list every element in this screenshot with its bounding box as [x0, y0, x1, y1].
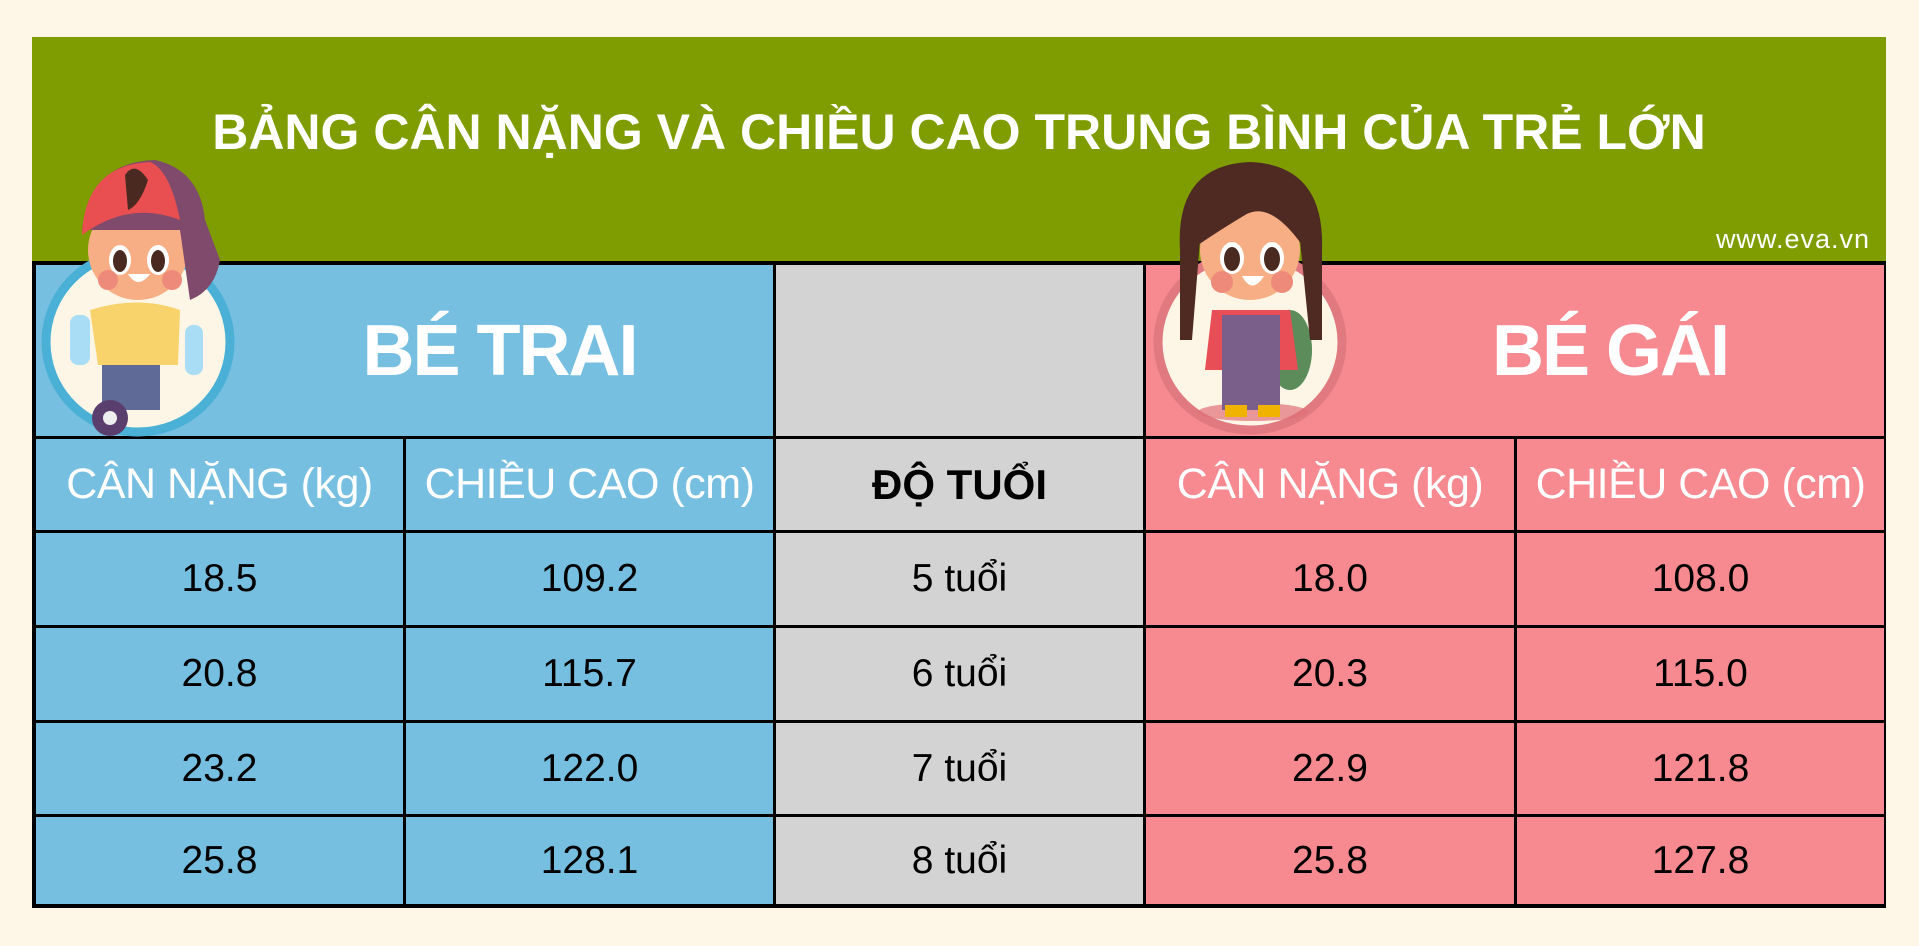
- table: 115.0: [1653, 652, 1748, 695]
- icon: girl: [1154, 162, 1346, 434]
- row 6: 20.8: [182, 652, 257, 695]
- table: 115.7: [542, 652, 637, 695]
- row 5: [34, 531, 405, 627]
- table: 25.8: [1292, 838, 1368, 882]
- row 8: 25.8: [182, 838, 257, 882]
- table: 20.3: [1292, 652, 1368, 695]
- row 7: 23.2: [182, 746, 257, 790]
- girl header: [1144, 263, 1886, 438]
- source: www.eva.vn: [1716, 224, 1870, 254]
- row 7: [34, 721, 405, 816]
- table: CÂN NẶNG (kg): [1177, 460, 1483, 508]
- title: BẢNG CÂN NẶNG VÀ CHIỀU CAO TRUNG BÌNH CỦA TRẺ LỚN: [212, 104, 1706, 160]
- table: 121.8: [1652, 746, 1749, 790]
- table: 22.9: [1292, 746, 1368, 790]
- column headers: [34, 437, 405, 532]
- table: 8 tuổi: [912, 838, 1007, 882]
- table: 108.0: [1652, 557, 1749, 600]
- table: 109.2: [541, 557, 638, 600]
- boy header: BÉ TRAI: [362, 310, 636, 390]
- table: CHIỀU CAO (cm): [1536, 460, 1865, 508]
- table: CHIỀU CAO (cm): [425, 460, 754, 508]
- girl header: BÉ GÁI: [1492, 310, 1728, 390]
- table: [32, 261, 1886, 908]
- table: 128.1: [541, 838, 638, 882]
- header banner: [32, 37, 1886, 262]
- boy header: [34, 263, 775, 438]
- table: 5 tuổi: [912, 557, 1007, 600]
- row 8: [34, 815, 405, 906]
- table: 127.8: [1652, 838, 1749, 882]
- table: ĐỘ TUỔI: [872, 460, 1047, 508]
- table: 6 tuổi: [912, 652, 1007, 695]
- table: 122.0: [541, 746, 638, 790]
- table: 18.0: [1292, 557, 1368, 600]
- icon: boy: [42, 160, 234, 436]
- row 5: 18.5: [182, 557, 257, 600]
- table: 7 tuổi: [912, 746, 1007, 790]
- column headers: CÂN NẶNG (kg): [66, 460, 373, 508]
- age header blank: [774, 263, 1145, 438]
- row 6: [34, 626, 405, 722]
